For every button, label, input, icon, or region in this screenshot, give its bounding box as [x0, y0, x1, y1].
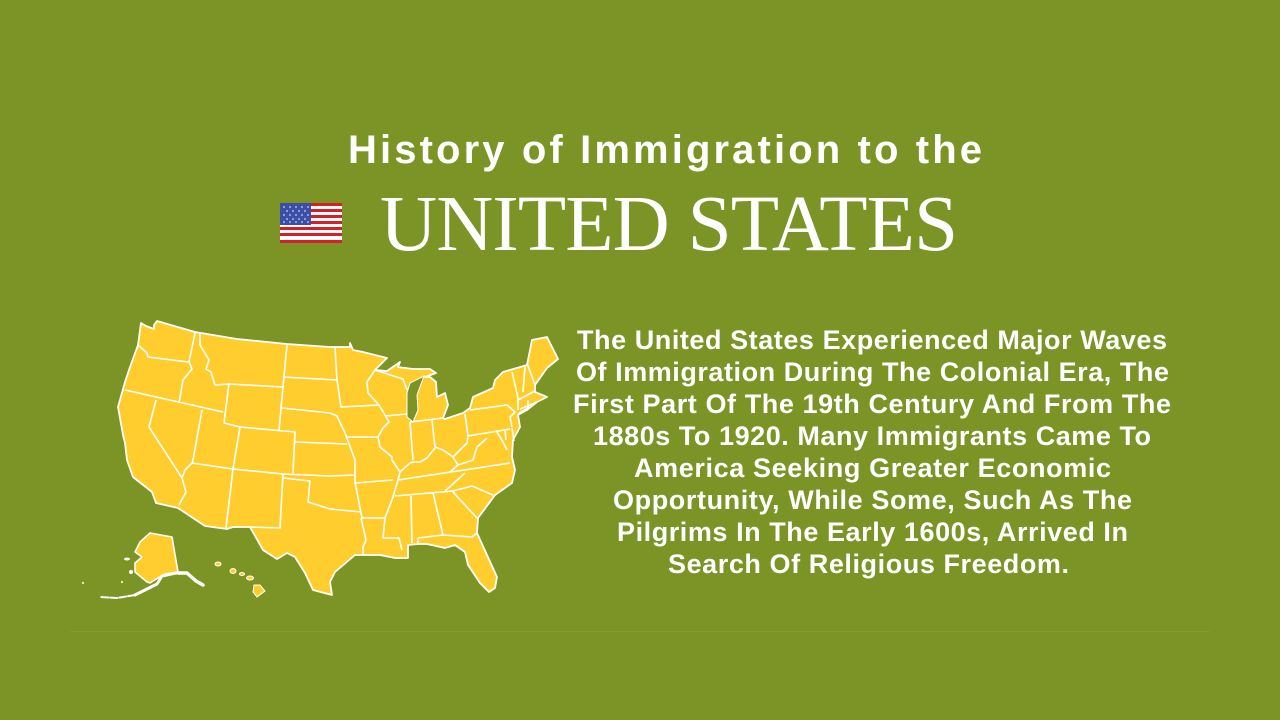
- lake michigan: [407, 376, 424, 422]
- text block: immigration summary: [573, 325, 1171, 579]
- text block: immigration summary: Opportunity, While Some, Such As The: [613, 485, 1132, 515]
- state borders: [125, 333, 537, 555]
- icon: US flag: [280, 203, 342, 243]
- text block: immigration summary: Pilgrims In The Early 1600s, Arrived In: [617, 517, 1128, 547]
- text block: immigration summary: Of Immigration During The Colonial Era, The: [576, 357, 1169, 387]
- text block: immigration summary: First Part Of The 19th Century And From The: [573, 389, 1171, 419]
- map: United States: [82, 321, 558, 598]
- hawaii: [215, 562, 265, 597]
- text block: immigration summary: Search Of Religious Freedom.: [668, 549, 1069, 579]
- heading: United States: UNITED STATES: [380, 181, 958, 268]
- text block: immigration summary: The United States Experienced Major Waves: [577, 325, 1167, 355]
- contiguous states: [118, 321, 558, 595]
- alaska: [82, 533, 203, 598]
- text block: immigration summary: 1880s To 1920. Many Immigrants Came To: [593, 421, 1151, 451]
- text block: immigration summary: America Seeking Greater Economic: [634, 453, 1111, 483]
- title: History of Immigration to the: History of Immigration to the: [348, 128, 982, 172]
